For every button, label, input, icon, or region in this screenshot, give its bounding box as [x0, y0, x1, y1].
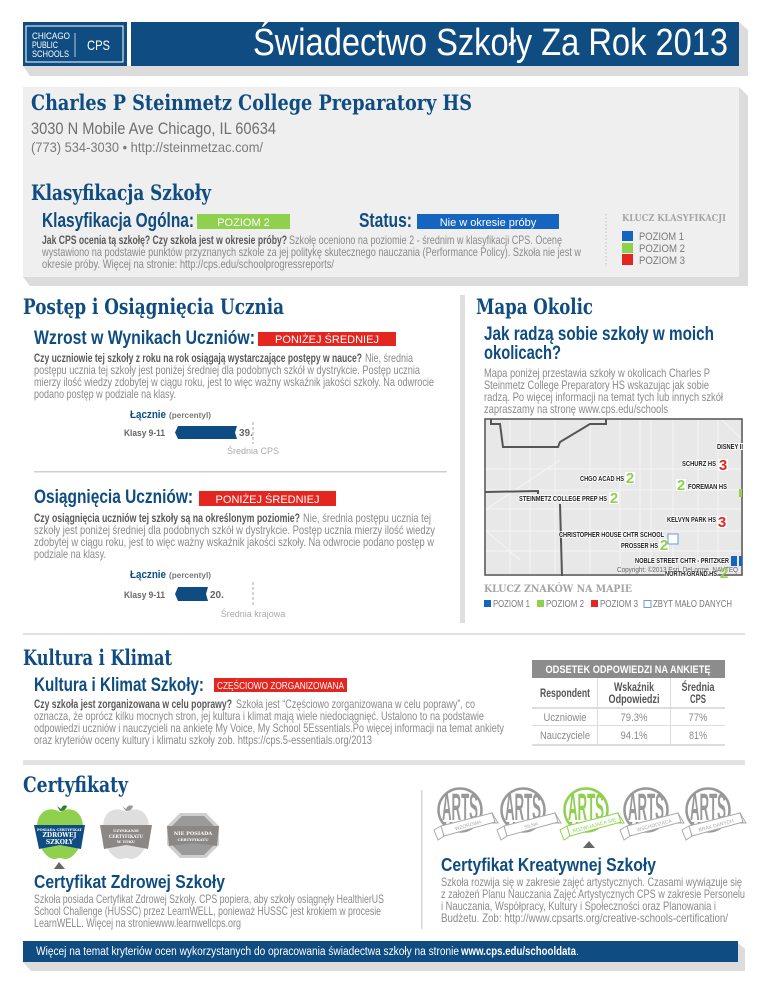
map school labels: DISNEY II [717, 442, 743, 451]
climate description: Szkoła jest “Częściowo zorganizowana w celu poprawy”, co [236, 697, 475, 711]
address: 3030 N Mobile Ave Chicago, IL 60634 [31, 119, 276, 138]
survey response table: Średnia [682, 681, 715, 694]
badge: not certified: CERTYFIKATU [177, 837, 209, 842]
survey response table: Respondent [540, 688, 590, 700]
heading: Certyfikat Zdrowej Szkoły: Certyfikat Zdrowej Szkoły [34, 872, 225, 892]
climate description: Czy szkoła jest zorganizowana w celu poprawy? [34, 697, 232, 711]
growth heading with badge: PONIŻEJ ŚREDNIEJ [275, 333, 379, 346]
logo: Chicago Public Schools: CPS [87, 37, 110, 53]
growth description: mierzy ilość wiedzy zdobytej w ciągu roku, jest to więc ważny wskaźnik jakości szkoły. Na odwrocie [34, 375, 434, 389]
arts badge: brak danych [682, 787, 746, 840]
map school labels: FOREMAN HS [688, 482, 727, 491]
map school labels: STEINMETZ COLLEGE PREP HS [519, 494, 607, 503]
growth bar chart: (percentyl) [169, 411, 211, 420]
classification key: POZIOM 3 [639, 255, 685, 267]
badge: not certified [167, 813, 219, 858]
arts badge: silna: ARTS [505, 787, 541, 829]
classification key: POZIOM 2 [639, 243, 685, 255]
map rating markers: 3 [718, 514, 726, 531]
arts badge: silna [497, 787, 561, 840]
map rating markers: 2 [720, 565, 728, 582]
badge: healthy school certified: SZKOŁY [46, 839, 74, 846]
map key: ZBYT MAŁO DANYCH [653, 599, 732, 610]
map key: KLUCZ ZNAKÓW NA MAPIE [484, 583, 632, 595]
map rating markers: 2 [610, 490, 618, 507]
status with badge [359, 210, 559, 232]
achievement heading with badge [34, 487, 336, 508]
map description [484, 366, 723, 416]
map key: POZIOM 2 [546, 599, 584, 610]
heading: Postęp i Osiągnięcia Ucznia: Postęp i Osiągnięcia Ucznia [23, 294, 284, 319]
survey response table: 81% [689, 730, 707, 742]
map key: POZIOM 1 [493, 599, 530, 610]
arts badge: wzorowa: ARTS [442, 787, 478, 829]
classification explanation: okresie próby. Więcej na stronie: http://cps.edu/schoolprogressreports/ [42, 257, 335, 271]
climate subheading with badge: CZĘŚCIOWO ZORGANIZOWANA [217, 679, 344, 692]
heading: Mapa Okolic: Mapa Okolic [476, 294, 593, 319]
subheading [484, 324, 714, 364]
map rating markers [609, 457, 742, 582]
footer banner: . [576, 946, 579, 958]
arts badge: silna: SILNA [524, 821, 540, 831]
growth heading with badge: Wzrost w Wynikach Uczniów: [34, 328, 255, 349]
map key [484, 583, 732, 610]
achievement bar chart: Łącznie [130, 569, 166, 581]
climate description [34, 697, 504, 747]
arts badge: rozwijająca się (selected): ARTS [568, 787, 604, 829]
arts badge: wzorowa: WZOROWA [454, 819, 483, 832]
header banner [23, 19, 748, 76]
survey response table: ODSETEK ODPOWIEDZI NA ANKIETĘ [546, 664, 710, 676]
achievement bar chart: Klasy 9-11 [124, 590, 165, 600]
status with badge: Nie w okresie próby [440, 217, 537, 229]
achievement description: szkoły jest poniżej średniej dla podobnych szkół w dystrykcie. Postęp ucznia mierzy ilość wiedzy [34, 523, 435, 537]
heading: Kultura i Klimat: Kultura i Klimat [23, 645, 172, 670]
growth bar chart [124, 409, 279, 456]
footer banner: www.cps.edu/schooldata [460, 946, 577, 958]
growth bar chart: Średnia CPS [227, 445, 279, 456]
overall rating with badge: POZIOM 2 [217, 217, 270, 229]
survey response table: Wskaźnik [614, 682, 654, 694]
healthy school description: Szkoła posiada Certyfikat Zdrowej Szkoły. CPS popiera, aby szkoły osiągnęły HealthierUS [34, 892, 384, 906]
map school labels: CHRISTOPHER HOUSE CHTR SCHOOL [559, 530, 664, 539]
map school labels: NOBLE STREET CHTR - PRITZKER [635, 556, 729, 565]
footer banner: Więcej na temat kryteriów ocen wykorzystanych do opracowania świadectwa szkoły na stronie [36, 946, 459, 958]
survey response table: Uczniowie [544, 712, 586, 724]
badge: healthy school certified: POSIADA CERTYFIKAT [37, 828, 82, 832]
survey response table: 94.1% [620, 730, 648, 742]
logo: Chicago Public Schools: SCHOOLS [32, 49, 69, 60]
school name: Charles P Steinmetz College Preparatory HS [31, 91, 472, 116]
achievement description: Czy osiągnięcia uczniów tej szkoły są na określonym poziomie? [34, 511, 300, 525]
healthy school description: LearnWELL. Więcej na stroniewww.learnwellcps.org [34, 916, 241, 930]
status with badge: Status: [359, 210, 412, 232]
arts badge: wzorowa [434, 787, 498, 840]
growth description: podano postęp w podziale na klasy. [34, 387, 176, 401]
logo: Chicago Public Schools: CHICAGO [32, 31, 70, 42]
map rating markers: 3 [719, 457, 727, 474]
badge: certification in progress [100, 805, 152, 859]
map [484, 418, 743, 582]
survey response table: CPS [690, 694, 706, 706]
map school labels: Copyright: ©2013 Esri, DeLorme, NAVTEQ [617, 566, 738, 574]
healthy school description [34, 892, 384, 930]
heading: Certyfikat Kreatywnej Szkoły: Certyfikat Kreatywnej Szkoły [441, 855, 656, 875]
creative school description [441, 875, 745, 925]
subheading: Jak radzą sobie szkoły w moich [484, 324, 714, 345]
achievement bar chart: Średnia krajowa [221, 608, 285, 619]
badge: certification in progress: UZYSKANIE [113, 828, 139, 833]
climate subheading with badge: Kultura i Klimat Szkoły: [34, 675, 204, 696]
badge: certification in progress: W TOKU [116, 839, 136, 844]
arts badge: rozwijająca się (selected) [560, 787, 624, 840]
map school labels: PROSSER HS [621, 541, 658, 550]
map school labels: KELVYN PARK HS [667, 515, 716, 524]
achievement bar chart: 20. [210, 590, 224, 601]
map school labels: NORTH-GRAND HS [665, 569, 717, 578]
map school labels: CHGO ACAD HS [580, 474, 624, 483]
arts badge: rozwijająca się (selected): ROZWIJAJĄCA SIĘ [572, 817, 617, 835]
map rating markers: 2 [677, 477, 685, 494]
classification explanation: Szkołę oceniono na poziomie 2 - średnim w klasyfikacji CPS. Ocenę [289, 233, 562, 247]
climate description: oraz kryteriów oceny kultury i klimatu szkoły zob. https://cps.5-essentials.org/2013 [34, 733, 372, 747]
panel: certifications [23, 772, 746, 930]
badge: healthy school certified [34, 805, 85, 859]
badge: not certified: NIE POSIADA [174, 831, 212, 837]
growth bar chart: Łącznie [130, 409, 166, 421]
subheading: okolicach? [484, 343, 561, 364]
panel: neighborhood map [476, 294, 743, 610]
map description: Mapa poniżej przestawia szkoły w okolicach Charles P [484, 366, 710, 380]
arts badge: wschodząca: WSCHODZĄCA [636, 818, 673, 834]
classification key [606, 214, 726, 267]
growth description: Czy uczniowie tej szkoły z roku na rok osiągają wystarczające postępy w nauce? [34, 351, 362, 365]
growth bar chart: 39. [239, 428, 253, 439]
overall rating with badge: Klasyfikacja Ogólna: [42, 210, 194, 232]
achievement bar chart [124, 569, 285, 619]
achievement description: zdobytej w ciągu roku, jest to więc ważny wskaźnik jakości szkoły. Na odwrocie podano postęp w [34, 535, 434, 549]
classification explanation [41, 233, 581, 271]
survey response table: Nauczyciele [540, 730, 590, 742]
achievement bar chart: (percentyl) [169, 571, 211, 580]
achievement heading with badge: Osiągnięcia Uczniów: [34, 487, 193, 508]
classification explanation: Jak CPS ocenia tą szkołę? Czy szkoła jest w okresie próby? [42, 233, 287, 247]
phone and website: (773) 534-3030 • http://steinmetzac.com/ [31, 139, 263, 155]
logo: Chicago Public Schools [23, 22, 127, 66]
growth description: Nie, średnia [365, 351, 413, 365]
panel: culture and climate [23, 645, 725, 747]
map rating markers: 2 [660, 537, 668, 554]
panel: student progress and achievement [23, 294, 447, 619]
growth description: postępu ucznia tej szkoły jest poniżej średniej dla podobnych szkół w dystrykcie. Postęp ucznia [34, 363, 420, 377]
survey response table: Odpowiedzi [608, 694, 660, 706]
achievement description: Nie, średnia postępu ucznia tej [303, 511, 431, 525]
arts badge: wschodząca [620, 787, 684, 840]
climate subheading with badge [34, 675, 347, 696]
heading: Klasyfikacja Szkoły: Klasyfikacja Szkoły [31, 180, 212, 205]
pointer arrow: arts [583, 841, 595, 848]
classification explanation: wystawiono na podstawie punktów przyznanych szkole za jej politykę skutecznego nauczania (Performance Policy). Szkoła nie jest w [41, 245, 581, 259]
survey response table: 77% [688, 712, 708, 724]
map key: POZIOM 3 [600, 599, 638, 610]
achievement description [34, 511, 435, 561]
survey response table [532, 660, 725, 746]
footer banner [23, 941, 745, 971]
map description: zapraszamy na stronę www.cps.edu/schools [484, 402, 668, 416]
achievement heading with badge: PONIŻEJ ŚREDNIEJ [216, 493, 319, 506]
map school labels [519, 442, 743, 578]
arts badge: wschodząca: ARTS [628, 787, 664, 829]
climate description: oznacza, że oprócz kilku mocnych stron, jej kultura i klimat mają wiele niedociągnięć. Ustalono to na podstawie [34, 709, 484, 723]
panel: school info and classification [23, 87, 748, 286]
map school labels: SCHURZ HS [682, 459, 716, 468]
climate description: odpowiedzi uczniów i nauczycieli na ankietę My Voice, My School 5Essentials.Po więcej informacji na temat ankiety [34, 721, 504, 735]
logo: Chicago Public Schools: PUBLIC [32, 40, 58, 51]
heading: Certyfikaty: Certyfikaty [23, 772, 129, 797]
badge: healthy school certified: ZDROWEJ [43, 832, 77, 839]
badge: certification in progress: CERTYFIKATU [109, 834, 143, 839]
arts badge: brak danych: BRAK DANYCH [698, 818, 735, 834]
growth description [34, 351, 434, 401]
title bar [131, 19, 739, 66]
healthy school description: School Challenge (HUSSC) przez LearnWELL, ponieważ HUSSC jest krokiem w procesie [34, 904, 381, 918]
map rating markers: 2 [626, 470, 634, 487]
pointer arrow: healthy school [54, 862, 65, 869]
classification key: POZIOM 1 [639, 231, 684, 243]
growth bar chart: Klasy 9-11 [124, 428, 165, 438]
survey response table: 79.3% [620, 712, 648, 724]
achievement description: podziale na klasy. [34, 547, 106, 561]
classification key: KLUCZ KLASYFIKACJI [622, 214, 726, 224]
